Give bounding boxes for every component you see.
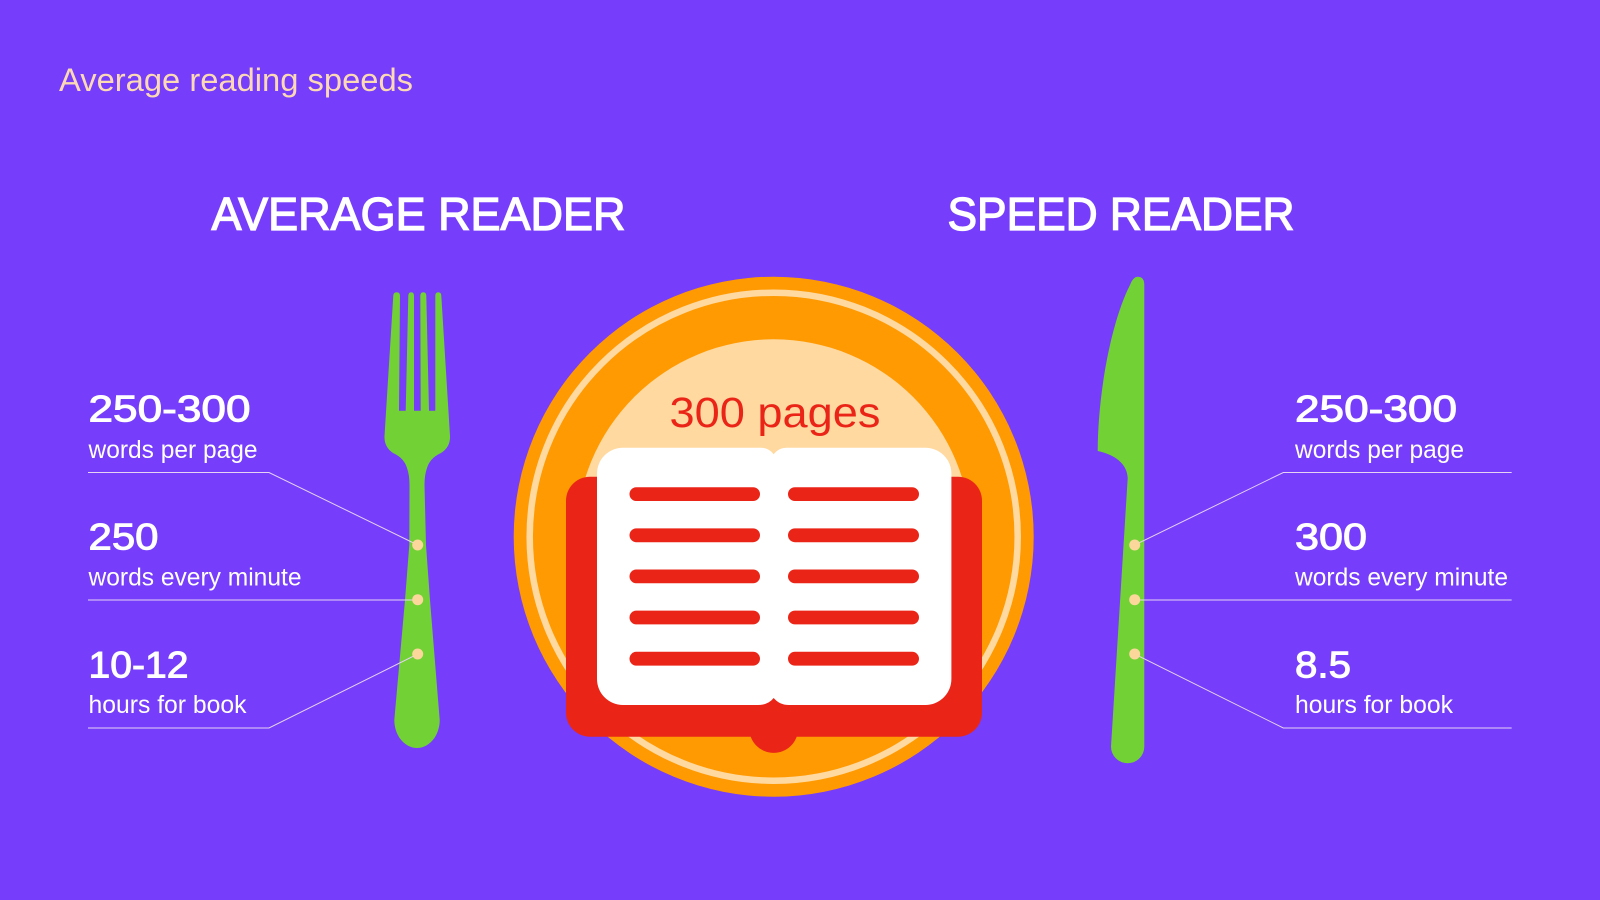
label: 300 pages: 300 pages xyxy=(670,389,880,437)
stat: speed hours for book xyxy=(1295,643,1453,719)
connector lines: average reader xyxy=(88,472,418,728)
plate xyxy=(514,277,1034,797)
title: Average reading speeds xyxy=(59,62,413,98)
stat: average words per page: words per page xyxy=(88,436,257,464)
stat: speed words per minute xyxy=(1294,516,1508,592)
stat: average words per minute: 250 xyxy=(88,516,158,558)
stat: average hours for book xyxy=(88,643,247,719)
stat: speed words per page xyxy=(1294,388,1464,464)
stat: average words per page xyxy=(88,388,257,464)
book pages xyxy=(597,448,951,705)
stat: average words per minute: words every minute xyxy=(88,564,302,592)
stat: average words per page: 250-300 xyxy=(88,388,250,430)
knife marker dots xyxy=(1129,540,1140,660)
stat: average hours for book: 10-12 xyxy=(88,643,188,685)
heading: average reader: AVERAGE READER xyxy=(212,188,626,240)
heading: speed reader: SPEED READER xyxy=(948,188,1294,240)
stat: speed hours for book: hours for book xyxy=(1295,691,1453,719)
stat: speed words per minute: words every minute xyxy=(1294,564,1508,592)
icon: fork xyxy=(384,292,450,748)
stat: speed words per page: words per page xyxy=(1294,436,1464,464)
connector lines: speed reader xyxy=(1135,472,1512,728)
stat: speed words per page: 250-300 xyxy=(1295,388,1457,430)
stat: speed words per minute: 300 xyxy=(1295,516,1367,558)
stat: speed hours for book: 8.5 xyxy=(1295,643,1351,685)
stat: average hours for book: hours for book xyxy=(88,691,247,719)
icon: knife xyxy=(1098,277,1144,763)
stat: average words per minute xyxy=(88,516,302,592)
fork marker dots xyxy=(412,540,423,660)
book cover xyxy=(566,477,982,753)
text lines on pages xyxy=(630,487,919,666)
icon: open book xyxy=(566,448,982,753)
